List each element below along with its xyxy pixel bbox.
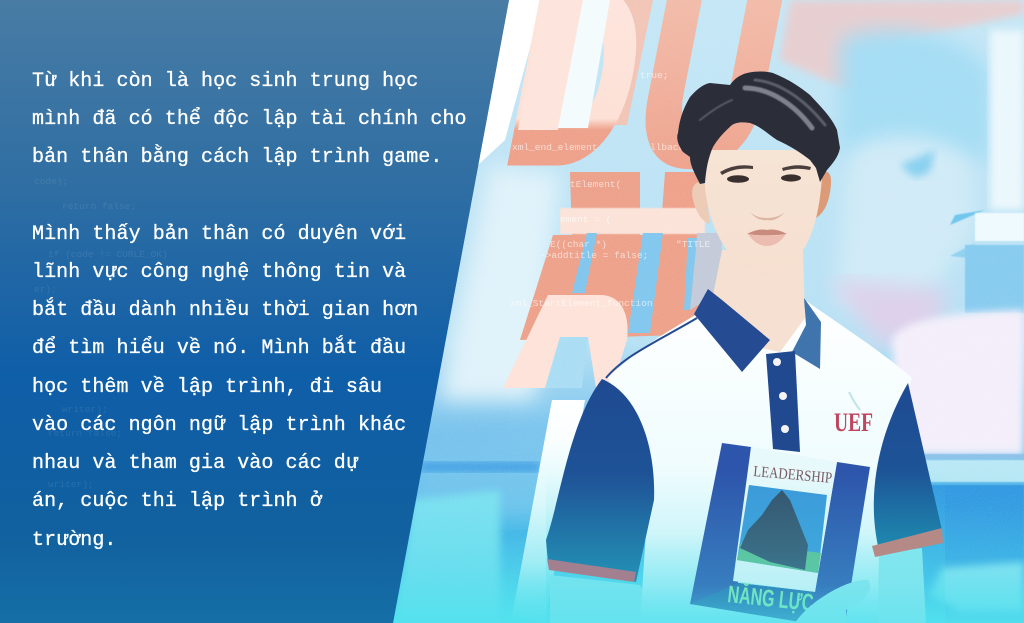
book subtitle: NĂNG LỰC: [726, 580, 815, 617]
hair: [677, 72, 840, 184]
cyan bottom fade: [393, 461, 1024, 623]
eyes and brows: [720, 165, 811, 183]
white diagonal strip behind the person: [512, 400, 585, 623]
UEF logo: UEF: [834, 408, 873, 437]
collar left: [694, 289, 770, 372]
placket with buttons: [766, 351, 800, 452]
face: [705, 150, 822, 274]
faint code in the left panel: code);: [34, 176, 68, 187]
background code text: "TITLE: [676, 239, 711, 250]
faint code in the left panel: return false;: [48, 428, 122, 439]
background: left mottled area: [398, 130, 612, 610]
cyan fade over person: [546, 470, 945, 623]
grain texture: [407, 0, 1024, 578]
faint code in the left panel: [34, 176, 168, 490]
background code text: tElement(: [570, 179, 621, 190]
background code text: E((char *): [550, 239, 607, 250]
ear left: [692, 182, 710, 224]
left sleeve cuff: [547, 559, 636, 582]
background: ghost portrait: [780, 0, 1024, 623]
ear right: [816, 172, 831, 218]
right sleeve cuff: [872, 528, 943, 557]
UEF logo: [834, 392, 873, 437]
right sleeve: [874, 383, 942, 546]
background code text: llback: [650, 142, 685, 153]
background code text: true;: [640, 70, 669, 81]
right arm: [872, 548, 926, 623]
background code text: ement = (: [560, 214, 611, 225]
large slanted name letters: [478, 0, 800, 388]
nose: [750, 212, 785, 220]
faint code in the left panel: er);: [34, 284, 57, 295]
right photo collage panel: [380, 0, 1024, 623]
hair highlight: [700, 80, 825, 128]
mouth: [747, 230, 787, 246]
person in polo shirt holding a book: [546, 72, 945, 623]
held book: [690, 443, 870, 623]
faint code in the left panel: if (code != CURLE_OK): [48, 249, 168, 260]
background code text: xml_StartElement_function: [510, 298, 653, 309]
left forearm: [550, 575, 660, 623]
story text block: Từ khi còn là học sinh trung học mình đã có thể độc lập tài chính cho bản thân bằng cách lập trình game. Mình thấy bản thân có duyên với lĩnh vực công nghệ thông tin và bắt đầu dành nhiều thời gian hơn để tìm hiểu về nó. Mình bắt đầu học thêm về lập trình, đi sâu vào các ngôn ngữ lập trình khác nhau và tham gia vào các dự án, cuộc thi lập trình ở trường.: [32, 70, 467, 552]
book cover photo: [737, 485, 827, 573]
hand: [795, 580, 870, 623]
left blue text panel: [0, 0, 509, 623]
neck: [713, 250, 805, 352]
left sleeve: [546, 379, 654, 582]
background code text: [510, 70, 711, 309]
faint code in the left panel: writer);: [48, 479, 94, 490]
book title: LEADERSHIP: [753, 463, 833, 487]
background code text: ->addtitle = false;: [540, 250, 648, 261]
collar right: [792, 298, 821, 369]
shirt body: [608, 300, 912, 623]
background code text: xml_end_element: [512, 142, 598, 153]
faint code in the left panel: writer);: [62, 404, 108, 415]
faint code in the left panel: return false;: [62, 201, 136, 212]
shirt piping: [606, 318, 697, 378]
